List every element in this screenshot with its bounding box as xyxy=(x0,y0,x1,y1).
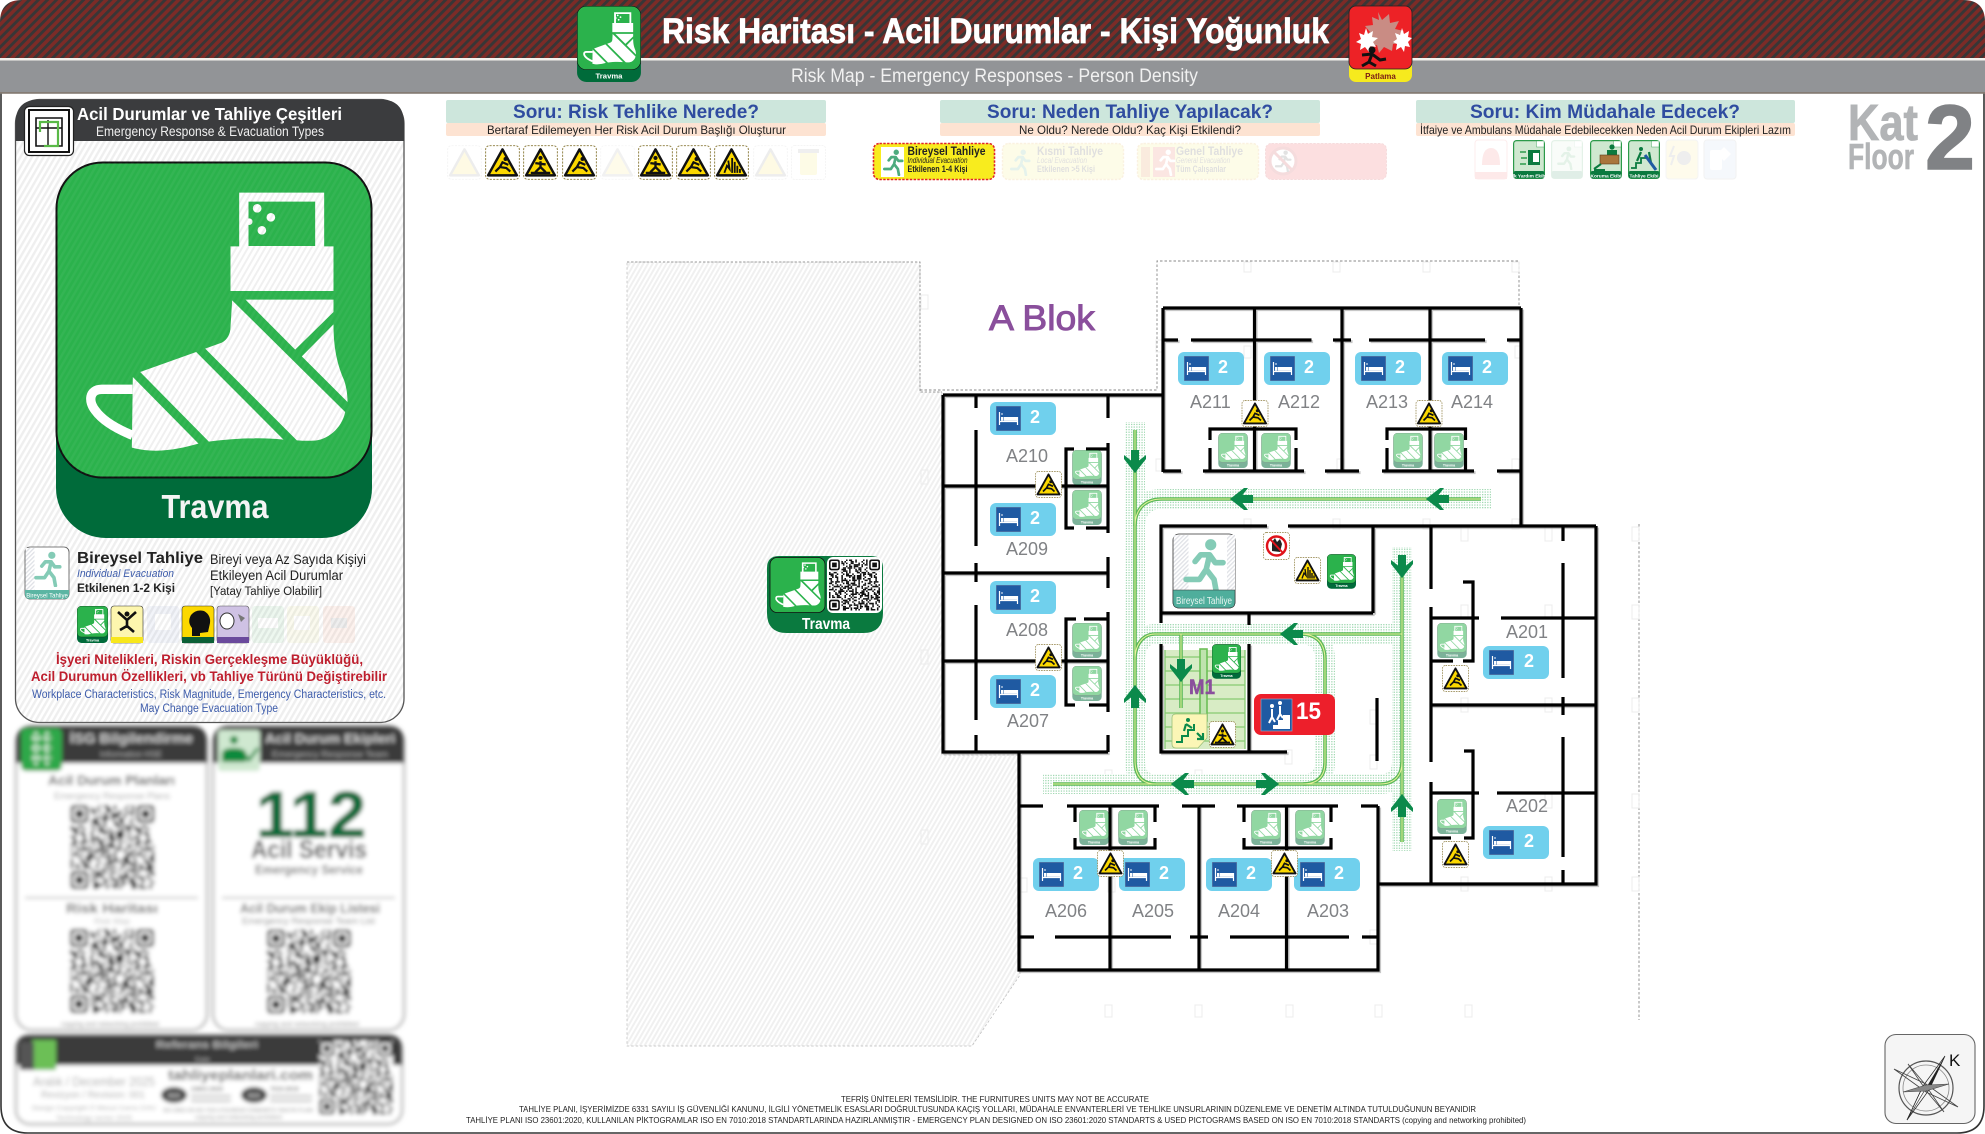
evacuation route xyxy=(1043,422,1491,851)
panel: question 1 risk xyxy=(446,100,826,180)
room bed badges: 2 xyxy=(1334,863,1344,883)
panel: emergency response team: Acil Servis xyxy=(251,836,367,864)
floor indicator xyxy=(1848,87,1975,189)
room bed badges: 2 xyxy=(1073,863,1083,883)
room bed badges: 2 xyxy=(1482,357,1492,377)
icon: trauma header badge xyxy=(577,6,641,82)
room labels: A210 xyxy=(1006,446,1048,466)
panel: reference information: copying and networking prohibited xyxy=(195,1115,282,1121)
badge: individual evacuation: Bireysel Tahliye xyxy=(908,144,986,158)
panel: İSG information: Information HSE xyxy=(100,750,162,759)
room bed badges: 2 xyxy=(1218,357,1228,377)
hatched adjacent area xyxy=(627,262,1020,1046)
room bed badges: 2 xyxy=(1030,407,1040,427)
english note in blue xyxy=(32,689,386,715)
panel: reference information: Technology sector 2025 xyxy=(56,1115,132,1122)
warning note in red: Acil Durumun Özellikleri, vb Tahliye Türünü Değiştirebilir xyxy=(31,669,388,684)
warning note in red: İşyeri Nitelikleri, Riskin Gerçekleşme Büyüklüğü, xyxy=(56,652,363,667)
room bed badges: 2 xyxy=(1524,831,1534,851)
room labels xyxy=(1006,392,1548,921)
walls shadow xyxy=(945,310,1598,972)
title: Risk Haritası - Acil Durumlar - Kişi Yoğunluk xyxy=(662,12,1329,51)
floor indicator: 2 xyxy=(1925,87,1975,189)
stairwell xyxy=(1165,649,1245,749)
footer disclaimer: TAHLİYE PLANI ISO 23601:2020, KULLANILAN PİKTOGRAMLAR ISO EN 7010:2018 STANDARTLARINDA HAZIRLANMIŞTIR - EMERGENCY PLAN DESIGNED ON ISO 23601:2020 STANDARTS & USED PICTOGRAMS BASED ON ISO EN 7010:2018 STANDARTS (copying and networking prohibited) xyxy=(466,1115,1526,1125)
panel: reference information: ISO 23601 EN ISO 7010 UYGUNDUR STANDARTS TAHLİYE PLANI xyxy=(163,1107,313,1114)
question subheading: İtfaiye ve Ambulans Müdahale Edebilecekken Neden Acil Durum Ekipleri Lazım xyxy=(1420,123,1791,137)
english note in blue: May Change Evacuation Type xyxy=(140,703,278,715)
room labels: A206 xyxy=(1045,901,1087,921)
icon: explosion header badge xyxy=(1349,6,1412,82)
panel: question 3 response teams xyxy=(1416,100,1795,180)
badge: general evacuation: General Evacuation xyxy=(1176,156,1230,165)
room bed badges: 2 xyxy=(1304,357,1314,377)
badge: local evacuation: Etkilenen >5 Kişi xyxy=(1037,164,1095,175)
footer disclaimer: TAHLİYE PLANI, İŞYERİMİZDE 6331 SAYILI İŞ GÜVENLİĞİ KANUNU, İLGİLİ YÖNETMELİK ESASLARI DOĞRULTUSUNDA KAÇIŞ YOLLARI, MÜDAHALE ENVANTERLERİ VE TEHLİKE UNSURLARININ DÜZENLEME VE DENETİM ALTINDA TUTULDUĞUNUN BEYANIDIR xyxy=(519,1104,1476,1114)
route arrows xyxy=(1124,450,1449,817)
number: 112: 112 xyxy=(256,778,366,851)
panel: blurred information panels xyxy=(16,726,404,1124)
stair hazard warning sign xyxy=(1210,722,1236,748)
panel: reference information: Date xyxy=(195,1057,210,1064)
response team icon row: Tahliye Ekibi xyxy=(1630,174,1658,180)
floor plan xyxy=(627,261,1639,1046)
footer disclaimer: TEFRİŞ ÜNİTELERİ TEMSİLİDİR. THE FURNITURES UNITS MAY NOT BE ACCURATE xyxy=(841,1094,1149,1104)
room label heading: A Blok: A Blok xyxy=(989,299,1096,338)
room bed badges: 2 xyxy=(1030,508,1040,528)
prohibition sign xyxy=(1264,532,1290,560)
evacuation type text xyxy=(77,550,203,595)
room bed badges: 2 xyxy=(1030,586,1040,606)
panel: question 2 evacuation xyxy=(874,100,1386,180)
room labels: A202 xyxy=(1506,796,1548,816)
evacuation description: [Yatay Tahliye Olabilir] xyxy=(210,586,322,598)
badge: no evacuation xyxy=(1266,144,1386,180)
room labels: A214 xyxy=(1451,392,1493,412)
floor indicator: Kat xyxy=(1848,94,1918,151)
room labels: A203 xyxy=(1307,901,1349,921)
compass: K xyxy=(1949,1051,1961,1070)
question heading: Soru: Risk Tehlike Nerede? xyxy=(513,102,759,123)
room labels: A201 xyxy=(1506,622,1548,642)
panel: reference information: 7010:2019 xyxy=(270,1087,299,1093)
shock hazard warning sign xyxy=(1294,558,1320,584)
room labels: A204 xyxy=(1218,901,1260,921)
trauma kit icon room xyxy=(1327,554,1356,589)
panel: emergency response team: Emergency Service xyxy=(255,863,363,877)
question heading: Soru: Neden Tahliye Yapılacak? xyxy=(987,102,1273,123)
room bed badges: 2 xyxy=(1524,651,1534,671)
footer disclaimer xyxy=(466,1094,1526,1125)
panel: İSG information xyxy=(16,726,207,1030)
panel: emergency response team: Emergency Response Team List xyxy=(242,916,376,926)
floor indicator: Floor xyxy=(1848,136,1914,177)
response team icon row: Koruma Ekibi xyxy=(1591,174,1621,180)
panel subheading: Emergency Response & Evacuation Types xyxy=(96,124,324,139)
badge: individual evacuation: Etkilenen 1-4 Kişi xyxy=(908,164,968,175)
panel: İSG information: Risk Map xyxy=(94,917,131,926)
icon: large trauma sign xyxy=(56,162,372,538)
evacuation type text: Etkilenen 1-2 Kişi xyxy=(77,581,175,595)
panel: reference information: ISO xyxy=(248,1093,261,1100)
icon: floor plan xyxy=(24,106,74,156)
badge: local evacuation: Kısmi Tahliye xyxy=(1037,144,1103,158)
room labels: A208 xyxy=(1006,620,1048,640)
room bed badges xyxy=(990,352,1549,891)
badge: general evacuation: Genel Tahliye xyxy=(1176,144,1243,158)
question subheading: Bertaraf Edilemeyen Her Risk Acil Durum Başlığı Oluşturur xyxy=(487,123,786,137)
panel: reference information xyxy=(16,1035,402,1124)
room bed badges: 2 xyxy=(1030,680,1040,700)
badge: individual evacuation xyxy=(874,144,994,180)
room bed badges: 2 xyxy=(1395,357,1405,377)
panel heading: Acil Durumlar ve Tahliye Çeşitleri xyxy=(77,104,342,124)
stair capacity badge: 15 xyxy=(1296,698,1321,725)
panel: reference information: Design Copyright © Mesut Cemo CHU xyxy=(32,1104,156,1112)
evacuation description: Etkileyen Acil Durumlar xyxy=(210,568,343,583)
panel: İSG information: İSG Bilgilendirme xyxy=(70,730,193,746)
room labels: A211 xyxy=(1190,392,1231,412)
subtitle: Risk Map - Emergency Responses - Person Density xyxy=(791,66,1198,87)
evacuation type text: Individual Evacuation xyxy=(77,568,174,580)
evacuation type text: Bireysel Tahliye xyxy=(77,550,203,567)
panel: emergency response team xyxy=(213,726,404,1030)
exit sign: Bireysel Tahliye xyxy=(1176,596,1232,607)
panel: reference information: Referans Bilgileri xyxy=(156,1039,258,1051)
response team icon row xyxy=(1475,140,1736,180)
panel: emergency response team: Emergency Response Team xyxy=(272,749,388,759)
trauma kit icon stairs xyxy=(1212,644,1241,679)
room labels: A212 xyxy=(1278,392,1320,412)
stair label M1: M1 xyxy=(1189,676,1215,699)
emergency icon row xyxy=(77,606,355,643)
callout: trauma sign with QR code xyxy=(767,556,883,633)
slip hazard warning signs xyxy=(1036,400,1468,876)
panel header bar xyxy=(16,100,404,141)
panel: İSG information: Risk Haritası xyxy=(66,900,158,916)
panel: emergency and evacuation types xyxy=(16,100,404,722)
callout: trauma sign with QR code: Travma xyxy=(802,616,850,633)
panel: emergency response team: copying and networking prohibited xyxy=(255,1022,359,1028)
room bed badges: 2 xyxy=(1159,863,1169,883)
room labels: A205 xyxy=(1132,901,1174,921)
badge: local evacuation xyxy=(1002,144,1124,180)
warning note in red xyxy=(31,652,388,684)
evacuation description: Bireyi veya Az Sayıda Kişiyi xyxy=(210,552,366,567)
panel: İSG information: Emergency Response Plans xyxy=(54,791,170,802)
response team icon row: İlk Yardım Ekibi xyxy=(1511,172,1547,180)
exit sign xyxy=(1173,534,1235,608)
panel: emergency response team: Acil Durum Ekipleri xyxy=(265,731,395,746)
english note in blue: Workplace Characteristics, Risk Magnitude, Emergency Characteristics, etc. xyxy=(32,689,386,701)
evacuation description xyxy=(210,552,366,598)
room labels: A213 xyxy=(1366,392,1408,412)
header band xyxy=(0,0,1985,94)
question subheading: Ne Oldu? Nerede Oldu? Kaç Kişi Etkilendi? xyxy=(1019,123,1241,137)
panel: reference information: Revizyon / Revision: 001 xyxy=(41,1090,145,1101)
risk hazard icon row xyxy=(448,146,826,180)
stair exit sign xyxy=(1172,714,1207,748)
panel: reference information: 23601:2020 xyxy=(191,1087,224,1093)
question heading: Soru: Kim Müdahale Edecek? xyxy=(1470,102,1740,123)
panel: reference information: tahliyeplanlari.com xyxy=(168,1067,313,1084)
badge: general evacuation: Tüm Çalışanlar xyxy=(1176,164,1226,175)
stair capacity badge xyxy=(1254,694,1335,735)
trauma kit icons in rooms xyxy=(1072,433,1467,845)
icon: individual evacuation: Bireysel Tahliye xyxy=(26,594,68,600)
icon: explosion header badge: Patlama xyxy=(1365,72,1396,81)
badge: individual evacuation: Individual Evacuation xyxy=(908,156,968,165)
badge: local evacuation: Local Evacuation xyxy=(1037,156,1087,165)
icon: individual evacuation xyxy=(25,547,69,600)
room labels: A207 xyxy=(1007,711,1049,731)
panel: reference information: Aralık / December 2025 xyxy=(33,1074,155,1089)
walls xyxy=(943,308,1596,970)
badge: general evacuation xyxy=(1138,144,1258,180)
panel: İSG information: copying and networking prohibited xyxy=(61,1022,159,1028)
room bed badges: 2 xyxy=(1246,863,1256,883)
panel: emergency response team: Acil Durum Ekip Listesi xyxy=(240,901,380,916)
panel: İSG information: Acil Durum Planları xyxy=(48,772,175,788)
icon: large trauma sign: Travma xyxy=(162,488,269,525)
panel: reference information: ISO xyxy=(168,1093,181,1100)
compass xyxy=(1885,1034,1975,1124)
room labels: A209 xyxy=(1006,539,1048,559)
